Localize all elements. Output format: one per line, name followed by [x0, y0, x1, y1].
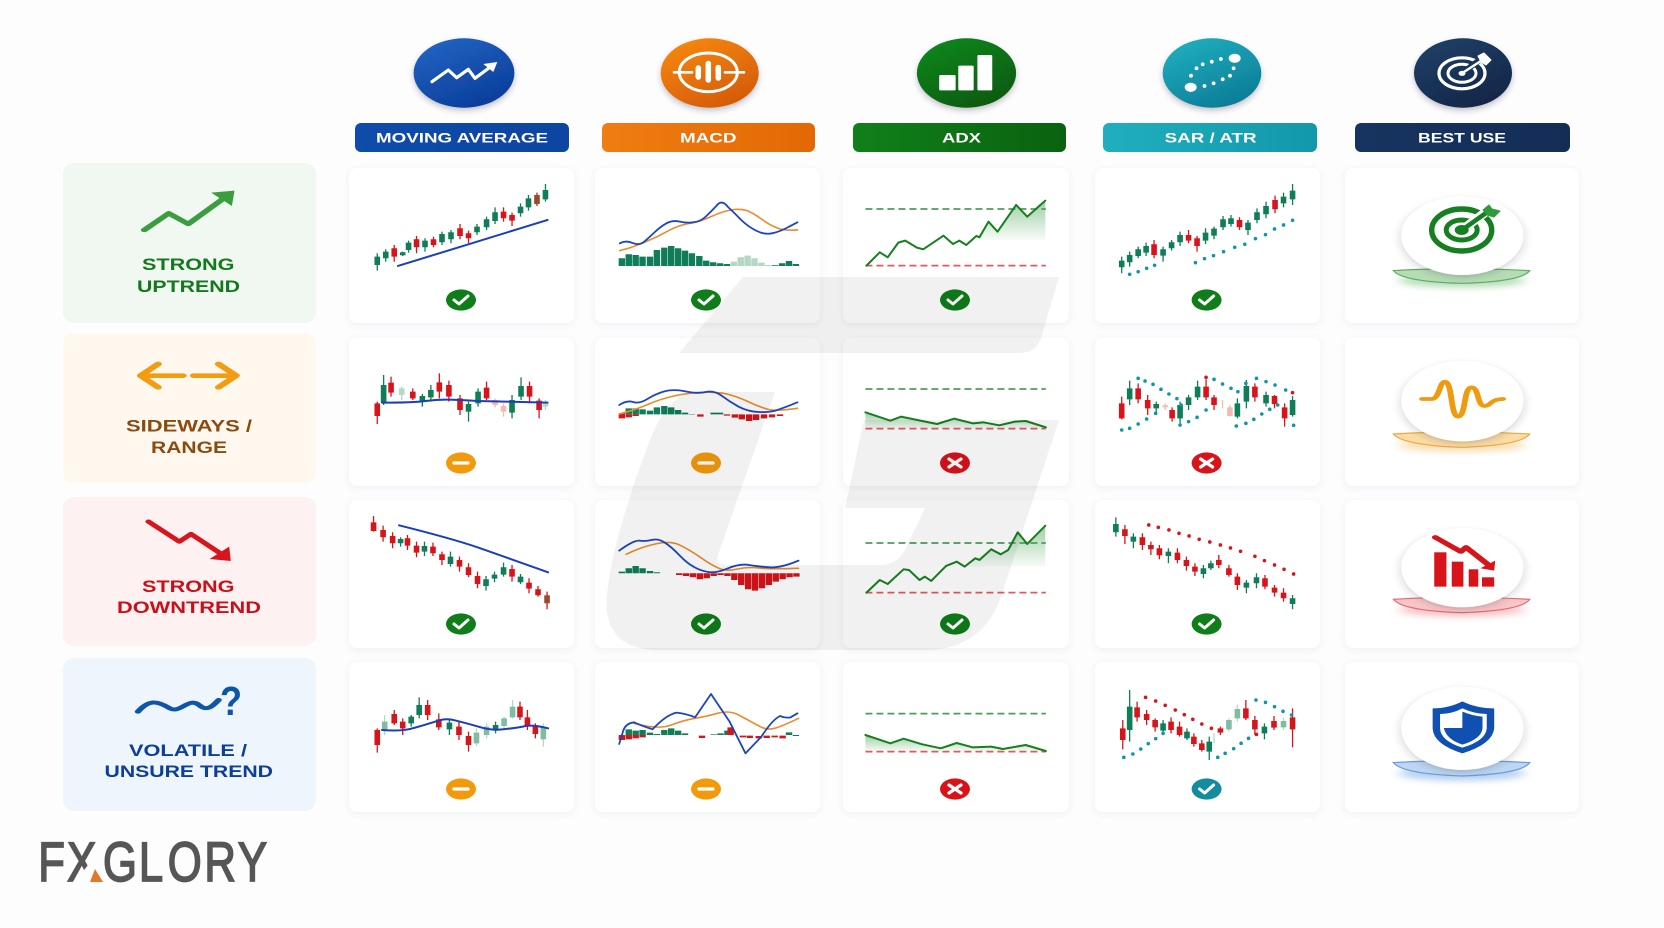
column header: moving average: MOVING AVERAGE: [376, 130, 548, 146]
candlestick chart with moving average: [377, 697, 548, 753]
cell: MACD, volatile: [595, 662, 820, 812]
icon: target on plate: [1393, 196, 1530, 287]
row: sideways / range: [63, 333, 1579, 486]
panel: volatile / unsure trend label: UNSURE TREND: [104, 763, 273, 781]
cell: ADX, downtrend: [843, 500, 1069, 648]
icon: pulse on plate: [1393, 361, 1530, 452]
panel: volatile / unsure trend label: [63, 658, 316, 811]
cell: moving average, volatile: [349, 662, 574, 812]
status: suitable: [446, 289, 476, 311]
panel: volatile / unsure trend label: ?: [220, 678, 242, 724]
status: partial: [446, 778, 476, 800]
cell: SAR / ATR, volatile: [1095, 662, 1320, 812]
cell: moving average, downtrend: [349, 500, 574, 648]
panel: strong downtrend label: [63, 497, 316, 646]
MACD chart: [619, 390, 797, 421]
panel: strong uptrend label: [63, 163, 316, 323]
row: volatile / unsure trend: [63, 658, 1579, 812]
candlestick chart with SAR dots: [1122, 184, 1293, 274]
status: suitable with caution: [1192, 778, 1222, 800]
ADX chart: [865, 714, 1046, 752]
icon: falling bars on plate: [1393, 528, 1530, 617]
cell: ADX, volatile: [843, 662, 1069, 812]
cell: MACD, sideways: [595, 338, 820, 486]
cell: best use, sideways: [1345, 338, 1579, 486]
panel: sideways / range label: SIDEWAYS /: [126, 418, 253, 436]
logo: FXGLORY: FXGLORY: [38, 831, 267, 893]
status: unsuitable: [940, 778, 970, 800]
row: strong uptrend: [63, 163, 1579, 323]
column header: MACD: [602, 38, 815, 152]
status: partial: [691, 452, 721, 474]
panel: volatile / unsure trend label: VOLATILE /: [129, 742, 248, 760]
panel: strong downtrend label: STRONG: [142, 578, 234, 596]
ADX chart: [865, 526, 1046, 593]
column header: best use: [1355, 38, 1570, 152]
MACD chart: [619, 539, 799, 591]
status: suitable: [1192, 289, 1222, 311]
column header: ADX: ADX: [942, 130, 982, 146]
status: suitable: [691, 289, 721, 311]
panel: strong uptrend label: UPTREND: [137, 278, 240, 296]
cell: MACD, downtrend: [595, 500, 820, 648]
column header: ADX: [853, 38, 1066, 152]
cell: MACD, strong uptrend: [595, 168, 820, 323]
cell: best use, downtrend: [1345, 500, 1579, 648]
MACD chart: [620, 203, 797, 266]
MACD chart: [619, 694, 799, 753]
status: unsuitable: [940, 452, 970, 474]
cell: best use, strong uptrend: [1345, 168, 1579, 323]
panel: strong downtrend label: DOWNTREND: [117, 599, 261, 617]
candlestick chart with moving average: [374, 516, 548, 609]
status: suitable: [691, 613, 721, 635]
header: indicator columns: [355, 38, 1570, 152]
panel: sideways / range label: RANGE: [151, 439, 227, 457]
cell: ADX, strong uptrend: [843, 168, 1069, 323]
panel: strong uptrend label: STRONG: [142, 256, 234, 274]
status: suitable: [940, 613, 970, 635]
cell: best use, volatile: [1345, 662, 1579, 812]
ADX chart: [865, 389, 1046, 429]
watermark: faint G logo: [607, 277, 1059, 650]
candlestick chart with moving average: [377, 373, 548, 424]
status: partial: [446, 452, 476, 474]
cell: SAR / ATR, sideways: [1095, 338, 1320, 486]
icon: shield on plate: [1393, 687, 1530, 781]
column header: moving average: [355, 38, 569, 152]
row: strong downtrend: [63, 497, 1579, 648]
ADX chart: [865, 201, 1046, 266]
candlestick chart with SAR dots: [1122, 377, 1294, 430]
column header: best use: BEST USE: [1418, 130, 1506, 146]
column header: MACD: MACD: [680, 130, 736, 146]
cell: moving average, sideways: [349, 338, 574, 486]
status: suitable: [1192, 613, 1222, 635]
candlestick chart with SAR dots: [1123, 690, 1293, 760]
panel: sideways / range label: [63, 333, 316, 483]
status: suitable: [940, 289, 970, 311]
column header: SAR / ATR: SAR / ATR: [1165, 130, 1257, 146]
cell: moving average, strong uptrend: [349, 168, 574, 323]
status: unsuitable: [1192, 452, 1222, 474]
candlestick chart with moving average: [377, 184, 548, 271]
status: suitable: [446, 613, 476, 635]
column header: SAR / ATR: [1103, 38, 1317, 152]
candlestick chart with SAR dots: [1116, 517, 1294, 609]
status: partial: [691, 778, 721, 800]
cell: SAR / ATR, strong uptrend: [1095, 168, 1320, 323]
cell: SAR / ATR, downtrend: [1095, 500, 1320, 648]
cell: ADX, sideways: [843, 338, 1069, 486]
